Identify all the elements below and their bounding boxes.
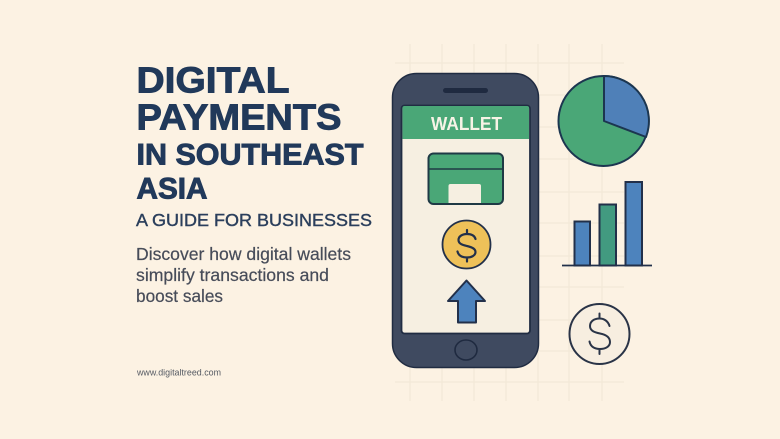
wallet header: WALLET (431, 114, 502, 134)
icon: wallet card (428, 154, 503, 204)
phone illustration (392, 74, 538, 368)
icon: dollar coin (442, 220, 490, 268)
bar chart (562, 182, 652, 266)
icon: dollar outline circle (570, 304, 630, 364)
description text: boost sales (136, 286, 223, 306)
pie chart (558, 76, 649, 166)
phone home button (455, 340, 477, 360)
phone speaker (443, 88, 488, 93)
phone screen (402, 106, 530, 334)
icon: up arrow (448, 280, 485, 322)
title: ASIA (136, 173, 208, 206)
phone body (392, 74, 538, 368)
title: PAYMENTS (136, 96, 342, 138)
description text: simplify transactions and (136, 265, 329, 285)
subtitle: A GUIDE FOR BUSINESSES (136, 210, 372, 230)
title (136, 60, 364, 206)
title: DIGITAL (136, 60, 290, 100)
description text: Discover how digital wallets (136, 244, 351, 264)
wallet header (402, 106, 529, 139)
description text (136, 244, 351, 306)
title: IN SOUTHEAST (136, 139, 364, 172)
website url: www.digitaltreed.com (136, 368, 221, 378)
